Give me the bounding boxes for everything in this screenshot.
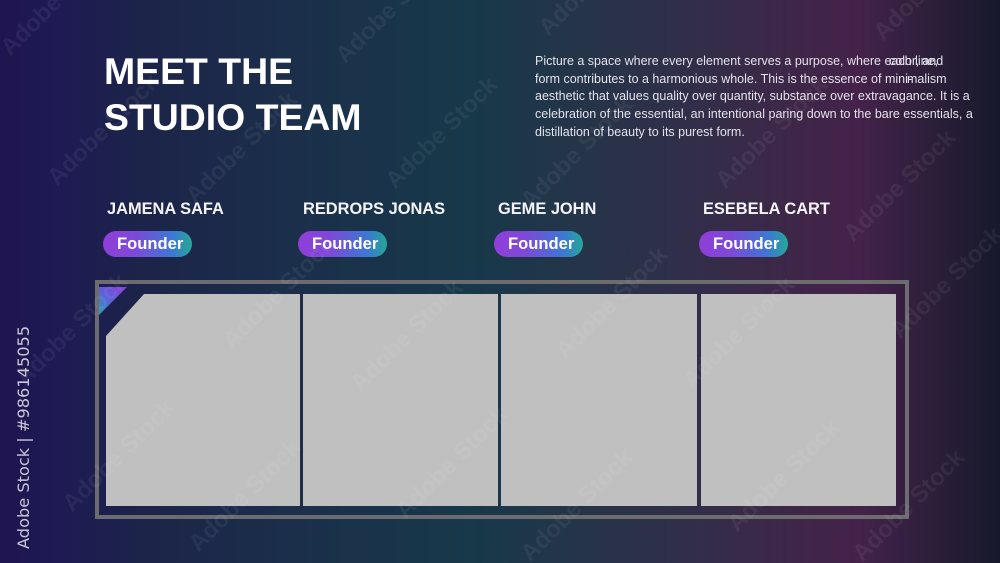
role badge: Redrops Jonas: Founder bbox=[312, 234, 378, 253]
description text block: distillation of beauty to its purest form. bbox=[535, 125, 745, 139]
name: Redrops Jonas: REDROPS JONAS bbox=[303, 200, 445, 218]
title: MEET THE bbox=[104, 50, 293, 92]
team member names bbox=[107, 200, 830, 218]
description text block: celebration of the essential, an intentional paring down to the bare essentials, a bbox=[535, 107, 973, 121]
description text block: malism bbox=[907, 72, 947, 86]
role badge: Geme John bbox=[494, 231, 583, 257]
role badge: Jamena Safa bbox=[103, 231, 192, 257]
photo placeholder 3 bbox=[501, 294, 697, 506]
name: Esebela Cart: ESEBELA CART bbox=[703, 200, 830, 218]
description text block: aesthetic that values quality over quantity, substance over extravagance. It is a bbox=[535, 89, 970, 103]
role badge: Geme John: Founder bbox=[508, 234, 574, 253]
photo placeholder 1 bbox=[106, 294, 300, 506]
description text block: Picture a space where every element serves a purpose, where each line, bbox=[535, 54, 938, 68]
title: STUDIO TEAM bbox=[104, 96, 362, 138]
photo frame bbox=[95, 280, 909, 519]
stock watermarks: Adobe Stock bbox=[217, 231, 340, 354]
stock watermarks: Adobe Stock bbox=[183, 434, 306, 557]
stock watermarks: Adobe Stock bbox=[57, 394, 180, 517]
role badge: Esebela Cart bbox=[699, 231, 788, 257]
stock watermarks: Adobe Stock bbox=[710, 71, 833, 194]
description text block bbox=[535, 54, 973, 139]
stock watermarks: Adobe Stock bbox=[10, 268, 133, 391]
stock watermarks: Adobe Stock bbox=[380, 71, 503, 194]
stock watermarks: Adobe Stock bbox=[550, 241, 673, 364]
stock watermarks: Adobe Stock bbox=[390, 401, 513, 524]
stock watermarks: Adobe Stock bbox=[677, 271, 800, 394]
photo placeholder 4 bbox=[701, 294, 896, 506]
role badge: Redrops Jonas bbox=[298, 231, 387, 257]
role badge: Jamena Safa: Founder bbox=[117, 234, 183, 253]
stock watermarks: Adobe Stock bbox=[838, 124, 961, 247]
stock watermarks: Adobe Stock bbox=[42, 68, 165, 191]
name: Jamena Safa: JAMENA SAFA bbox=[107, 200, 224, 218]
stock watermarks: Adobe Stock bbox=[345, 274, 468, 397]
stock watermarks: Adobe Stock bbox=[722, 414, 845, 537]
role badge: Esebela Cart: Founder bbox=[713, 234, 779, 253]
description text block: form contributes to a harmonious whole. This is the essence of mini- bbox=[535, 72, 912, 86]
stock watermarks: Adobe Stock bbox=[180, 86, 303, 209]
corner accent triangle bbox=[99, 287, 127, 315]
description text block: color, and bbox=[889, 54, 943, 68]
stock watermarks: Adobe Stock bbox=[515, 91, 638, 214]
side stock credit: Adobe Stock | #986145055 bbox=[14, 326, 33, 549]
title bbox=[104, 50, 362, 138]
photo placeholder 2 bbox=[303, 294, 498, 506]
name: Geme John: GEME JOHN bbox=[498, 200, 596, 218]
